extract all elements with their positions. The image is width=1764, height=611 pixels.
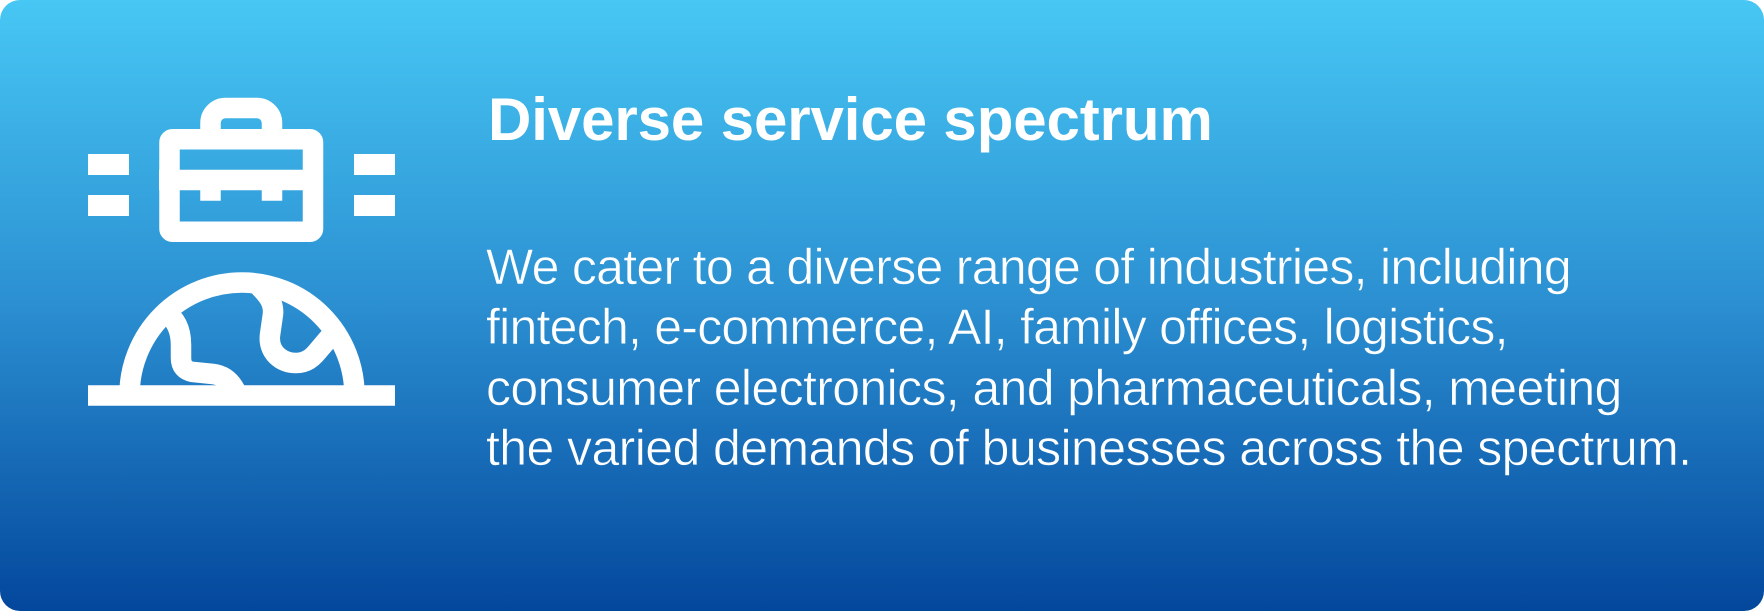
body text (486, 239, 1691, 476)
body text: consumer electronics, and pharmaceuticals, meeting (486, 360, 1622, 416)
heading: Diverse service spectrum (488, 86, 1213, 153)
body text: the varied demands of businesses across the spectrum. (486, 420, 1691, 476)
icon: globe (88, 283, 395, 396)
body text: We cater to a diverse range of industries, including (486, 239, 1571, 295)
icon: briefcase (159, 108, 323, 232)
icon: side dashes (88, 154, 395, 216)
body text: fintech, e-commerce, AI, family offices, logistics, (486, 299, 1508, 355)
